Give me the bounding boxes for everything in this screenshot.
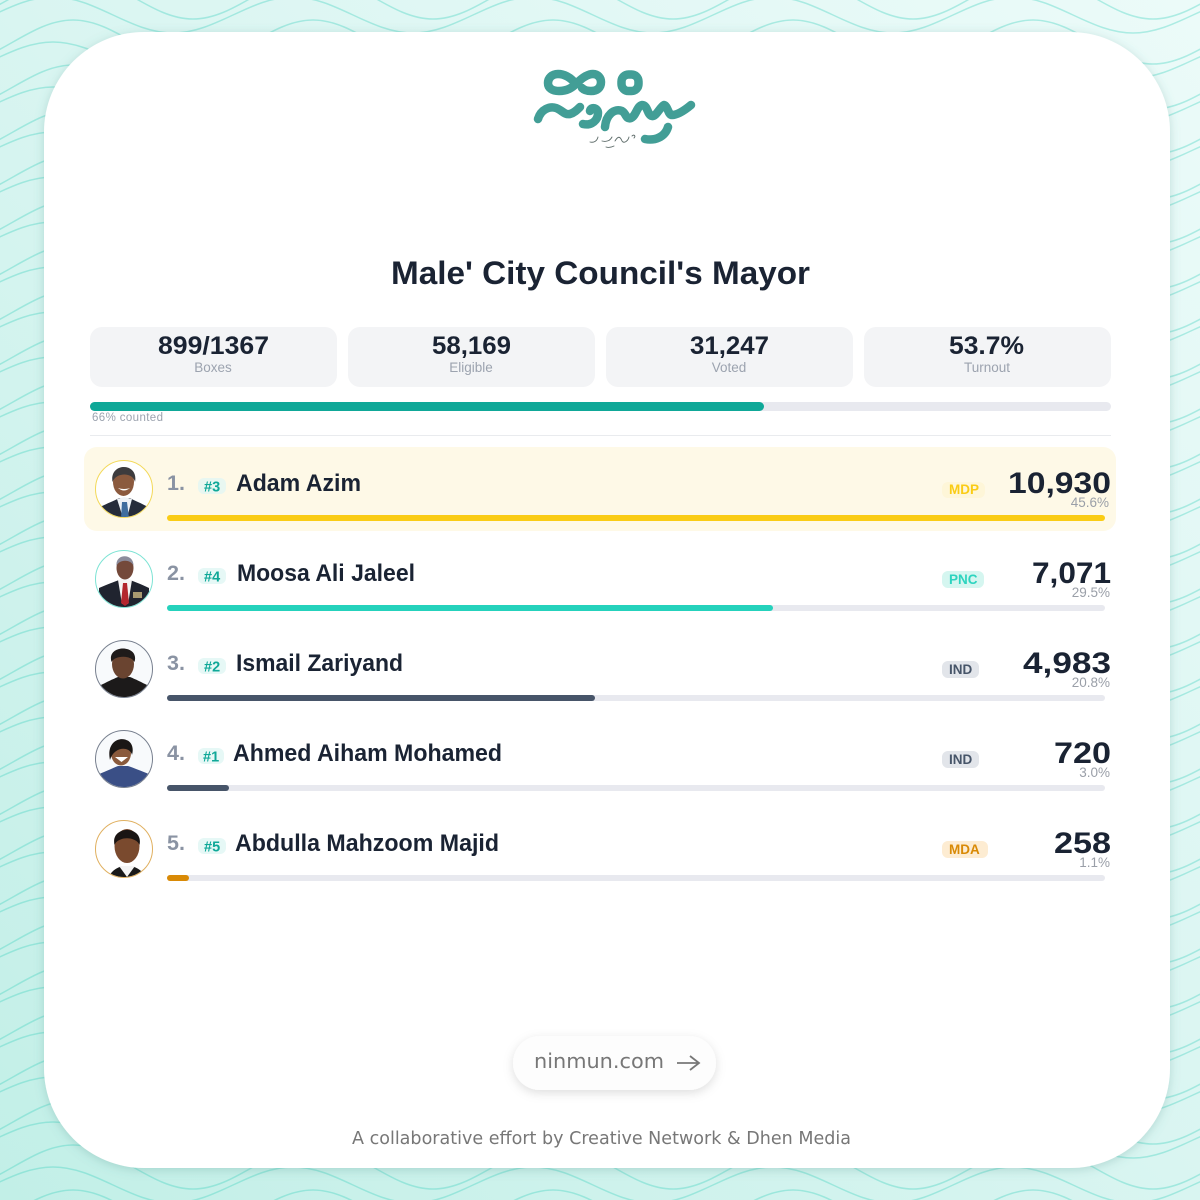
candidate row 5: Abdulla Mahzoom Majid: 258 [1054,827,1111,860]
candidate row 2: Moosa Ali Jaleel: 29.5% [1072,585,1110,600]
candidate row 2: Moosa Ali Jaleel: Moosa Ali Jaleel [237,560,415,587]
candidate row 3: Ismail Zariyand: 3. [167,651,185,675]
stat card: boxes [90,327,337,387]
stat card: eligible [348,327,595,387]
candidate row 3: Ismail Zariyand: 4,983 [1023,647,1111,680]
candidate row 1: Adam Azim: #3 [204,480,220,496]
stat card: boxes: Boxes [194,360,232,375]
logo [538,74,691,147]
stat card: voted [606,327,853,387]
candidate row 5: Abdulla Mahzoom Majid: 1.1% [1079,855,1110,870]
avatar: Moosa Ali Jaleel [96,550,152,608]
counting progress bar: 66% counted [92,412,163,424]
candidate row 4: Ahmed Aiham Mohamed: Ahmed Aiham Mohamed [233,740,502,767]
candidate row 1: Adam Azim: 45.6% [1071,495,1109,510]
candidate row 5: Abdulla Mahzoom Majid [96,820,1111,881]
avatar: Abdulla Mahzoom Majid [96,820,152,878]
candidate row 3: Ismail Zariyand: Ismail Zariyand [236,650,403,677]
candidate row 4: Ahmed Aiham Mohamed [96,730,1111,791]
candidate row 2: Moosa Ali Jaleel [96,550,1111,611]
avatar: Ismail Zariyand [96,640,152,698]
candidate row 5: Abdulla Mahzoom Majid: #5 [204,840,220,856]
stat card: voted: 31,247 [690,332,769,360]
candidate row 3: Ismail Zariyand [96,640,1111,701]
candidate row 4: Ahmed Aiham Mohamed: #1 [203,750,219,766]
candidate row 3: Ismail Zariyand: #2 [204,660,220,676]
footer credit: A collaborative effort by Creative Network & Dhen Media [352,1129,851,1149]
candidate row 1: Adam Azim: Adam Azim [236,470,361,497]
candidate row 1: Adam Azim: 10,930 [1008,467,1111,500]
stat card: eligible: Eligible [449,360,493,375]
candidate row 1: Adam Azim: MDP [949,482,979,497]
candidate row 5: Abdulla Mahzoom Majid: 5. [167,831,185,855]
candidate row 1: Adam Azim: 1. [167,471,185,495]
candidate row 2: Moosa Ali Jaleel: #4 [204,570,220,586]
stat card: voted: Voted [712,360,746,375]
candidate row 5: Abdulla Mahzoom Majid: Abdulla Mahzoom Majid [235,830,499,857]
candidate row 1: Adam Azim [84,447,1116,531]
candidate row 4: Ahmed Aiham Mohamed: 4. [167,741,185,765]
icon: arrow [677,1056,699,1070]
stat card: eligible: 58,169 [432,332,511,360]
stat card: turnout [864,327,1111,387]
website link pill: ninmun.com [534,1049,664,1073]
candidate row 2: Moosa Ali Jaleel: PNC [949,572,978,587]
candidate row 3: Ismail Zariyand: 20.8% [1072,675,1110,690]
candidate row 4: Ahmed Aiham Mohamed: 720 [1054,737,1111,770]
candidate row 3: Ismail Zariyand: IND [949,662,972,677]
avatar: Adam Azim [96,460,152,518]
counting progress bar [90,402,1111,424]
avatar: Ahmed Aiham Mohamed [96,730,152,788]
stat card: turnout: Turnout [964,360,1010,375]
candidate row 2: Moosa Ali Jaleel: 7,071 [1032,557,1111,590]
candidate row 2: Moosa Ali Jaleel: 2. [167,561,185,585]
stat card: boxes: 899/1367 [158,332,269,360]
candidate row 5: Abdulla Mahzoom Majid: MDA [949,842,980,857]
stat card: turnout: 53.7% [949,332,1024,360]
website link pill [513,1036,716,1090]
candidate row 4: Ahmed Aiham Mohamed: 3.0% [1079,765,1110,780]
title: Male' City Council's Mayor [391,255,810,291]
candidate row 4: Ahmed Aiham Mohamed: IND [949,752,972,767]
